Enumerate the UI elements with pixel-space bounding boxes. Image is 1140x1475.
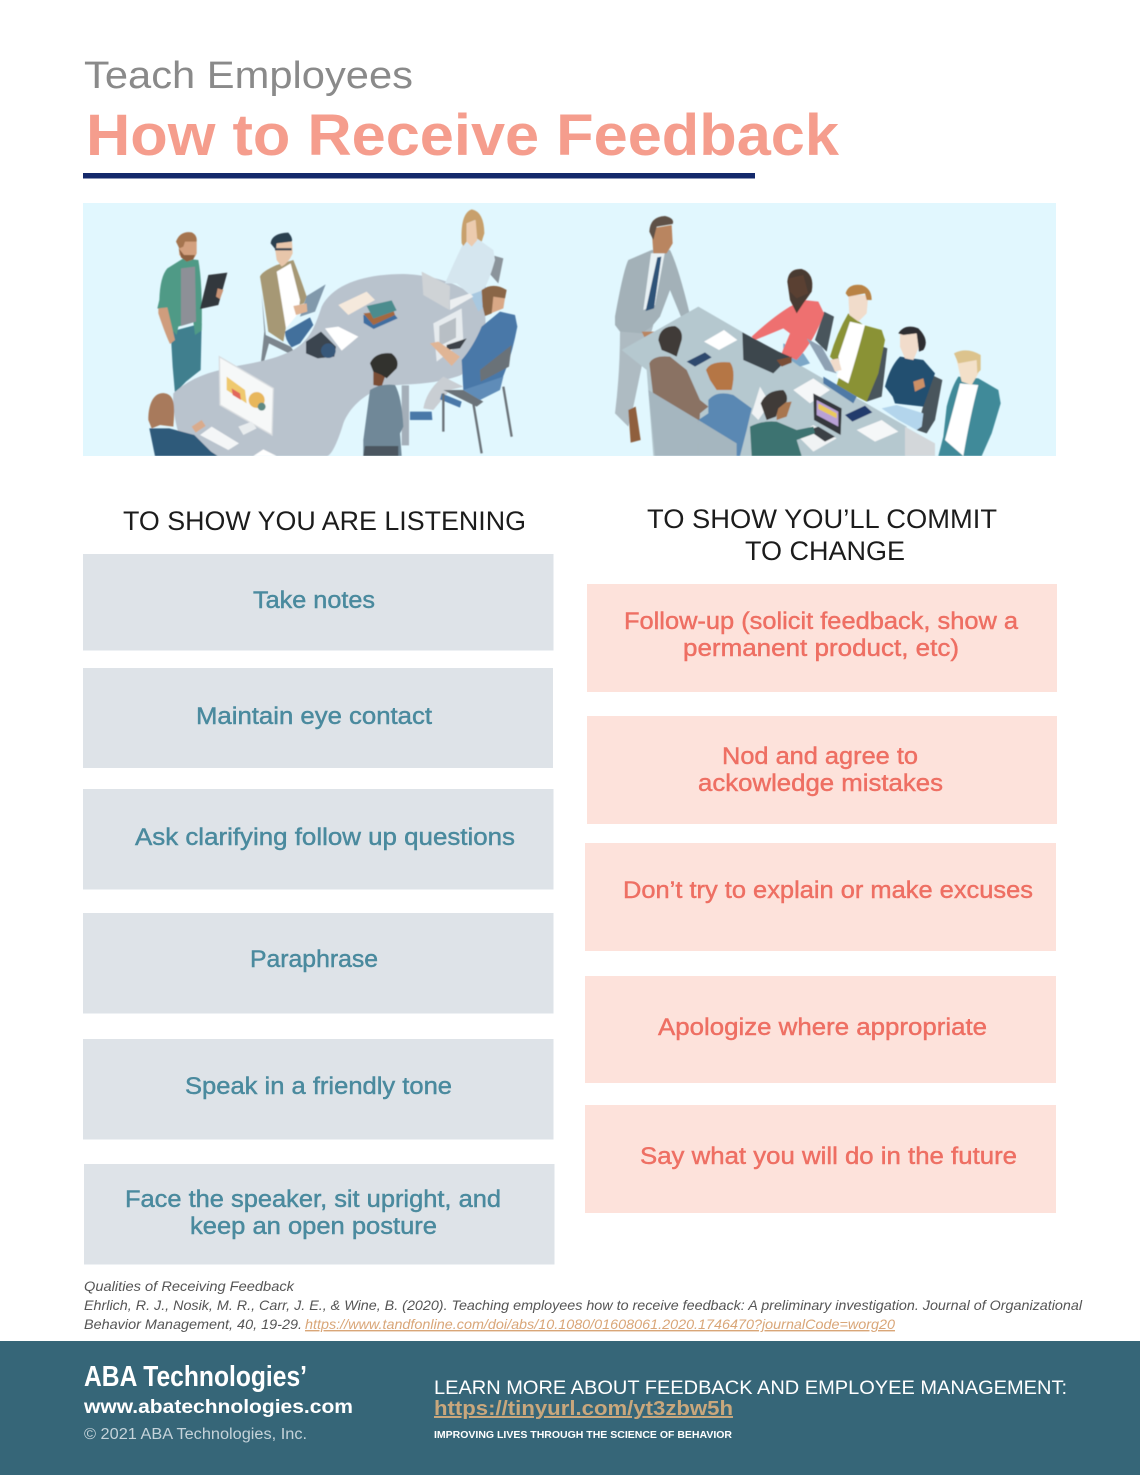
person: bearded man with blue sweater [410,286,517,453]
illustration panel: two meetings [83,203,1056,456]
footer website: www.abatechnologies.com [83,1397,353,1418]
citation text [84,1278,1083,1332]
card: apologize: Apologize where appropriate [658,1014,987,1041]
title: How to Receive Feedback: How to Receive Feedback [86,103,840,168]
person: blond man in teal jacket [905,350,1001,456]
card: nod and agree [587,716,1057,824]
person: man with glasses, green sweater [750,390,815,456]
card: ask clarifying questions [83,789,554,890]
citation text: Behavior Management, 40, 19-29. [84,1316,302,1332]
card: face the speaker: keep an open posture [190,1213,437,1240]
table [622,307,907,456]
card: take notes: Take notes [253,587,375,614]
person: man in olive jacket [807,285,887,403]
card: follow-up [587,584,1057,692]
citation text: Qualities of Receiving Feedback [84,1278,295,1294]
footer logo: ABA Technologies: ABA Technologies’ [84,1361,307,1393]
footer copyright: © 2021 ABA Technologies, Inc. [84,1426,307,1443]
card: friendly tone: Speak in a friendly tone [185,1073,452,1100]
card: no excuses: Don’t try to explain or make excuses [623,877,1033,904]
footer tagline: IMPROVING LIVES THROUGH THE SCIENCE OF BEHAVIOR [434,1430,733,1441]
card: nod and agree: Nod and agree to [722,743,918,770]
person: woman with bun in blue, back view [698,362,770,456]
list: commitment behaviours [585,584,1057,1213]
card: follow-up: Follow-up (solicit feedback, show a [624,608,1019,635]
person: woman with bun, back view [363,353,403,456]
footer call to action: LEARN MORE ABOUT FEEDBACK AND EMPLOYEE MANAGEMENT: [434,1377,1067,1399]
column heading: commit to change [647,504,997,566]
illustration: right meeting around rectangular table [615,216,1001,456]
card: no excuses [585,843,1056,951]
card: nod and agree: ackowledge mistakes [698,770,943,797]
title block [83,55,840,178]
card: maintain eye contact: Maintain eye contact [196,703,432,730]
card: follow-up: permanent product, etc) [683,635,959,662]
card: say what you will do [585,1105,1056,1213]
card: ask clarifying questions: Ask clarifying follow up questions [135,824,515,851]
citation text: Ehrlich, R. J., Nosik, M. R., Carr, J. E., & Wine, B. (2020). Teaching employees how to receive feedback: A preliminary investigation. Journal of Organizational [84,1297,1083,1313]
person: woman at computer, bottom left [148,393,218,456]
card: apologize [585,976,1056,1083]
person: standing man in green shirt [157,232,227,393]
card: face the speaker [84,1164,554,1264]
card: friendly tone [83,1039,554,1140]
person: seated man with tablet [260,233,326,347]
card: face the speaker: Face the speaker, sit upright, and [125,1186,501,1213]
card: maintain eye contact [83,668,553,768]
person: woman with crossed arms [882,327,942,433]
person: woman in light hoodie with laptop [422,209,503,312]
footer band [0,1341,1140,1475]
table leg [402,385,409,445]
person: woman in coral blouse [752,269,834,367]
title: Teach Employees: Teach Employees [84,55,413,97]
books, paper and camera on table [306,292,398,358]
person: standing man in grey suit [614,215,690,444]
person: bearded man in brown, back view [648,326,708,456]
list: listening behaviours [83,554,554,1264]
monitor with charts and keyboard [200,357,277,456]
column heading: commit to change: TO SHOW YOU’LL COMMIT [647,504,997,534]
footer link: https://tinyurl.com/yt3zbw5h [434,1398,733,1420]
illustration: left meeting around curved table [148,209,517,456]
card: paraphrase [83,913,554,1014]
table: curved grey table [173,274,486,456]
card: take notes [83,554,554,650]
table items: papers, phones and laptops [687,330,898,452]
card: say what you will do: Say what you will do in the future [640,1143,1017,1170]
seated man's chair [261,293,294,362]
card: paraphrase: Paraphrase [250,946,378,973]
citation text: https://www.tandfonline.com/doi/abs/10.1080/01608061.2020.1746470?journalCode=worg20 [305,1316,895,1332]
column heading: commit to change: TO CHANGE [745,536,905,566]
title underline [83,173,755,178]
column heading: listening: TO SHOW YOU ARE LISTENING [123,506,526,536]
